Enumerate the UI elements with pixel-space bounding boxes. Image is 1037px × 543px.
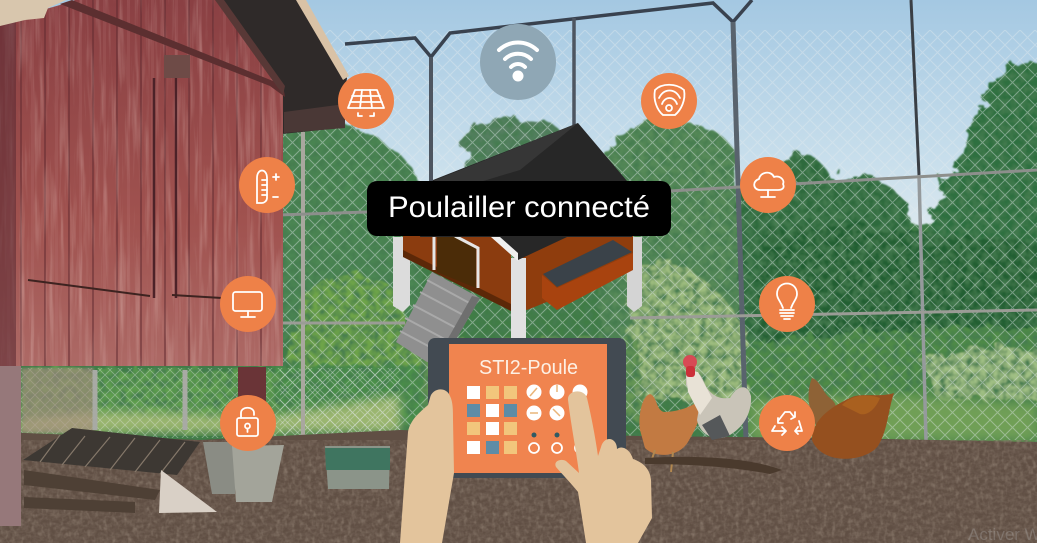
coop right leg <box>627 237 642 312</box>
icon: padlock <box>220 395 276 451</box>
rear bucket <box>203 442 235 494</box>
dials <box>526 384 588 420</box>
chicken coop illustration <box>393 123 642 362</box>
status squares <box>467 386 517 454</box>
stone <box>159 470 217 513</box>
barn rafter <box>215 0 285 95</box>
icon: light bulb <box>759 276 815 332</box>
icon: thermometer <box>239 157 295 213</box>
rooster <box>683 355 751 440</box>
coop left leg <box>393 237 410 312</box>
photo background: sky <box>0 0 1037 300</box>
icon: monitor <box>220 276 276 332</box>
nest box front <box>542 253 633 310</box>
door hinge <box>164 55 190 78</box>
indicator dots <box>532 432 560 438</box>
icon: cloud network <box>740 157 796 213</box>
indicator rings <box>529 443 585 453</box>
front bucket <box>232 445 284 502</box>
icon: dome camera <box>641 73 697 129</box>
barn wall <box>0 0 285 370</box>
tablet title: STI2-Poule <box>479 357 578 379</box>
large brown hen <box>812 393 894 459</box>
coop door <box>437 236 476 288</box>
barn left post <box>0 366 21 526</box>
hen left <box>639 394 703 472</box>
left hand <box>400 389 454 543</box>
title label <box>367 181 671 236</box>
wooden planks <box>24 470 160 513</box>
icon: wifi <box>480 24 556 100</box>
corrugated sheet <box>23 428 200 475</box>
photo background: trees and vegetation <box>0 63 1037 470</box>
coop left wall <box>403 232 511 311</box>
nest box lid <box>543 240 632 287</box>
barn right post <box>238 367 266 403</box>
coop roof edge <box>491 237 518 261</box>
green bucket <box>325 446 390 489</box>
barn beam <box>60 0 285 97</box>
coop roof <box>420 123 632 260</box>
chain-link fence <box>20 0 1037 440</box>
barn <box>0 0 349 526</box>
tablet <box>428 338 626 478</box>
yard objects <box>23 428 390 513</box>
photo background: dirt ground <box>0 430 1037 543</box>
barn upper-left roof trim <box>0 0 66 26</box>
tablet screen <box>449 344 607 473</box>
barn roof underside <box>215 0 347 134</box>
chickens <box>639 355 894 474</box>
barn roof edge trim <box>296 0 349 80</box>
tablet body <box>428 338 626 478</box>
photo background: lower vegetation base <box>0 300 1037 445</box>
icon: solar panel <box>338 73 394 129</box>
title label: Poulailler connecté <box>388 191 650 224</box>
photo background: light grass strip <box>20 395 400 432</box>
coop front post <box>511 258 526 342</box>
icon: recycle <box>759 395 815 451</box>
coop right wall <box>518 232 633 310</box>
small brown hen <box>809 378 836 425</box>
coop ramp <box>396 272 480 362</box>
branch <box>645 457 782 474</box>
right hand <box>555 391 652 543</box>
